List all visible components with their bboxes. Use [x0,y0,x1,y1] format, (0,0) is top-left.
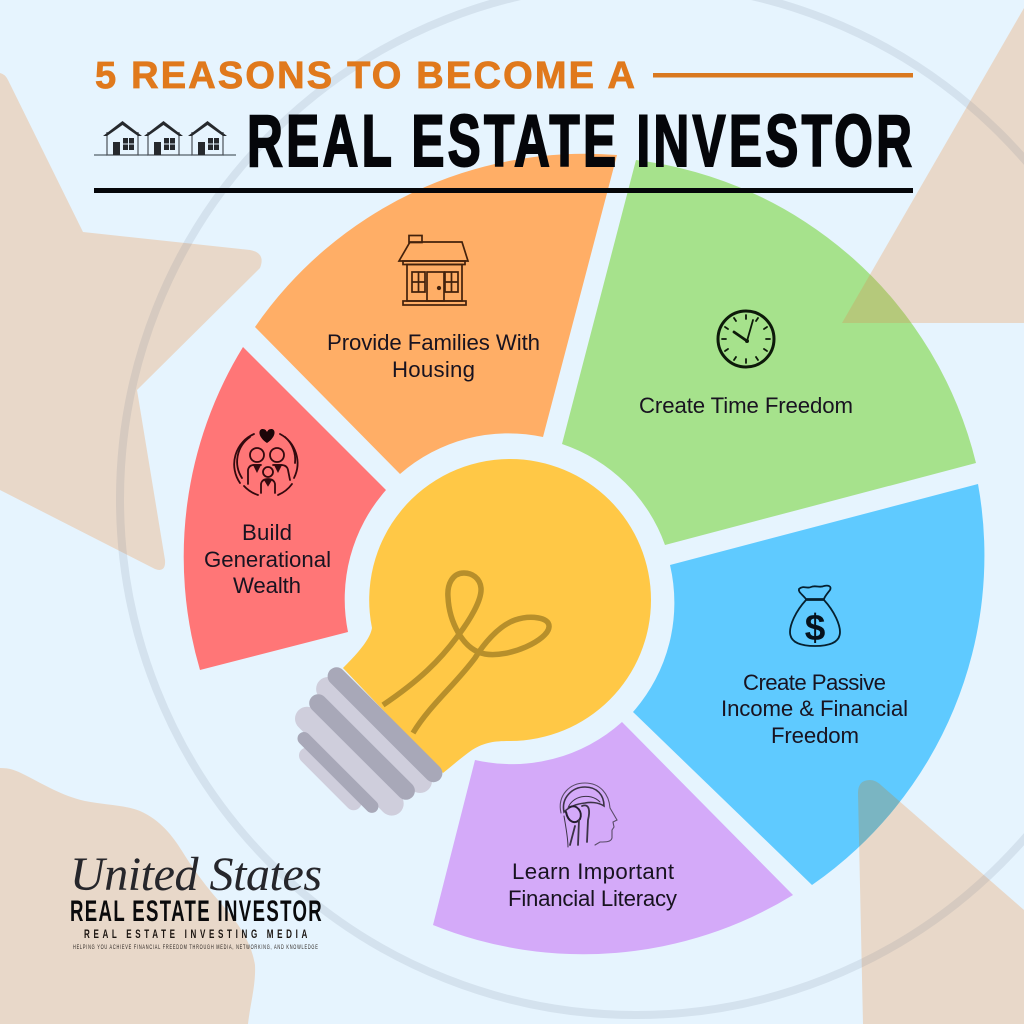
logo tagline: HELPING YOU ACHIEVE FINANCIAL FREEDOM THROUGH MEDIA, NETWORKING, AND KNOWLEDGE [73,944,318,951]
beige triangle bottom right [858,780,1024,1024]
logo: united states real estate investor [70,848,322,951]
label: build generational wealth: Wealth [233,573,301,598]
filament [383,573,549,733]
beige star shape top left [0,73,262,570]
label: learn important financial literacy: Learn Important [512,859,674,884]
label: provide families with housing: Provide Families With [327,330,540,355]
panel: build generational wealth [184,347,386,670]
bulb glass [343,459,651,773]
black title rule [94,188,913,193]
triangle overlap on blue panel [858,780,900,847]
label: create time freedom: Create Time Freedom [639,393,853,418]
icon: house [399,236,468,305]
label: create passive income and financial freedom [721,670,908,748]
panel: learn important financial literacy [433,722,793,954]
screw base [304,676,433,806]
label: provide families with housing [327,330,540,382]
beige blob bottom left [0,768,255,1024]
subtitle: 5 reasons to become a: 5 REASONS TO BECOME A [95,55,635,97]
label: create passive income and financial freedom: Freedom [771,723,859,748]
triangle overlap on green panel [842,274,912,323]
panel: create passive income and financial freedom [633,484,984,885]
label: learn important financial literacy: Financial Literacy [508,886,678,911]
icon: clock [718,311,774,367]
beige triangle top right [842,8,1024,323]
label: build generational wealth [204,520,331,598]
logo script: United States [70,848,322,901]
light bulb [304,459,651,806]
panel: create time freedom [562,160,976,545]
panel: provide families with housing [255,154,617,474]
icon: money bag: $ [805,607,826,648]
icon: family in circle [234,429,298,495]
label: learn important financial literacy [508,859,678,911]
logo name: REAL ESTATE INVESTOR [70,895,322,928]
label: create passive income and financial freedom: Create Passive [743,670,886,695]
icon: money bag [790,586,840,648]
label: provide families with housing: Housing [392,357,475,382]
label: create passive income and financial freedom: Income & Financial [721,696,908,721]
title: real estate investor: REAL ESTATE INVESTOR [247,101,912,182]
icon: row of houses [94,121,236,155]
label: build generational wealth: Generational [204,547,331,572]
logo media line: REAL ESTATE INVESTING MEDIA [84,929,307,941]
label: build generational wealth: Build [242,520,292,545]
icon: head with brain [560,783,617,847]
orange title rule [653,73,913,78]
